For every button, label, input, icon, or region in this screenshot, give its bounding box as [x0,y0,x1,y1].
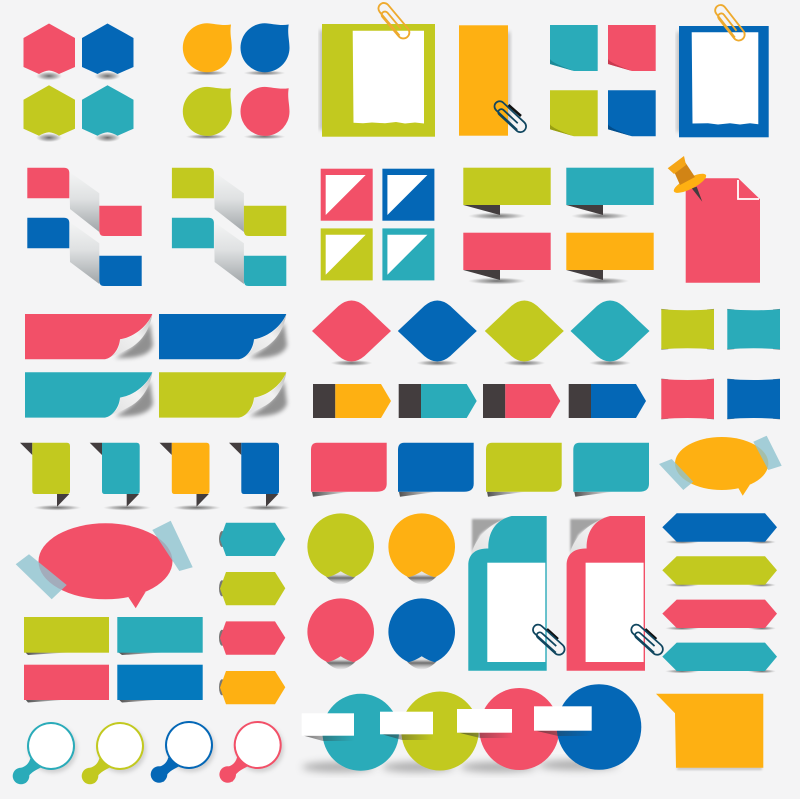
teardrop: blue [241,23,290,76]
group: rounded cards with cast shadow [311,443,649,497]
side tag: teal [219,523,285,556]
ring: teal [13,722,77,784]
group: rounded diamonds [312,300,650,366]
group: large circles with white labels [302,684,641,772]
note: orange flag shaped sheet [656,694,763,770]
sticky: pink [608,25,656,71]
group: flag tags with dark folds [20,443,290,511]
sticky: teal [550,25,598,71]
group: sticky notes with folded corner [550,25,656,136]
bar: lime [662,556,777,587]
diamond: blue [398,300,477,366]
banner: blue curl [159,314,287,359]
square: blue [382,169,434,221]
card: teal with curled corner and clip [468,516,567,671]
label: white on teal and lime [380,712,433,740]
side tag: pink [219,621,285,655]
banner: teal [566,168,654,220]
circle: blue [388,598,455,669]
banner: lime curl [159,372,287,418]
card: pink with curled corner and clip [567,516,665,671]
teardrop: orange [183,23,232,76]
ring: blue [151,721,215,783]
icon: orange paperclip [712,3,747,43]
flag: teal [90,443,151,511]
arrow tag: orange [313,384,391,418]
icon: push pin [668,156,709,202]
rectangle: blue [727,379,780,419]
flag: lime [20,443,81,511]
large circle: teal [322,694,399,771]
circle: pink [307,598,374,669]
group: ring callouts with tail [13,721,284,784]
group: ribbon flow pink and blue [27,168,142,286]
bar: blue [662,513,777,544]
group: banners with dark flap [463,168,654,284]
tape: left [659,459,693,490]
rectangle: teal [117,617,203,655]
group: circles with bottom notch [307,513,455,669]
rectangle: blue [117,665,203,702]
group: small concave rectangles [661,309,780,419]
square: lime [321,228,373,280]
arrow tag: blue [569,384,646,418]
tape: left [16,554,67,599]
group: teardrop circles [183,23,290,139]
hexagon: lime [24,85,75,142]
group: arrow tags with dark tab [313,384,646,418]
note: pink page with push pin [668,156,760,283]
banner: pink [463,233,551,284]
note: orange tall sheet with clip [459,25,528,136]
arrow tag: pink [483,384,560,418]
icon: orange paperclip [375,1,412,41]
rectangle: pink [661,379,714,419]
large circle: blue [557,684,641,770]
speech bubble: orange with tape [659,436,782,496]
card: teal [573,443,649,497]
rectangle: lime [661,309,714,349]
bar: teal [662,643,777,673]
diamond: pink [312,300,391,366]
ribbon: blue step [27,218,142,286]
ring: lime [82,722,146,784]
icon: dark paperclip [530,622,567,657]
banner: pink curl [25,314,153,359]
group: side tags with left fold [219,523,285,704]
ribbon: teal step [172,218,286,286]
large circle: lime [401,692,479,770]
hexagon: pink [24,24,75,80]
diamond: lime [485,300,564,366]
rectangle: pink [24,665,109,702]
hexagon: blue [82,24,134,80]
group: squares with white triangles [321,169,434,280]
group: double pointed bars [662,513,777,673]
ring: pink [219,721,284,783]
rectangle: lime [24,617,109,655]
flag: blue [229,443,290,511]
side tag: orange [219,671,285,704]
side tag: lime [219,572,285,605]
square: pink [321,169,373,221]
arrow tag: teal [399,384,477,418]
note: blue frame with white sheet and clip [677,3,769,137]
large circle: pink [479,688,559,770]
circle: lime [307,513,374,584]
icon: dark paperclip [492,99,528,134]
sticky: blue [608,90,656,136]
group: curled corner banners [25,314,287,418]
bar: pink [662,600,777,630]
ribbon: lime step [172,168,286,236]
speech bubble: pink with tape [16,521,193,608]
label: white on pink and blue [534,706,592,736]
rectangle: teal [727,309,780,349]
note: lime frame with white sheet and clip [320,1,435,137]
label: white on teal [302,713,354,741]
tape: right [753,436,782,470]
circle: orange [388,513,455,584]
hexagon: teal [82,85,134,142]
sticky: lime [550,90,598,136]
card: blue [398,443,474,497]
banner: lime [463,168,551,220]
icon: dark paperclip [628,622,665,657]
label: white on lime and pink [457,709,512,738]
card: lime [486,443,562,497]
flag: orange [160,443,221,511]
banner: orange [566,233,654,284]
tape: right [152,521,193,571]
ribbon: pink step [27,168,142,236]
banner: teal curl [25,372,153,418]
teardrop: pink [241,87,290,139]
card: pink [311,443,387,497]
group: rectangles with slanted shadow [24,617,203,702]
group: folded hexagon tags [24,24,134,142]
teardrop: lime [183,87,232,139]
group: ribbon flow lime and teal [172,168,286,286]
square: teal [382,228,434,280]
diamond: teal [570,300,650,366]
